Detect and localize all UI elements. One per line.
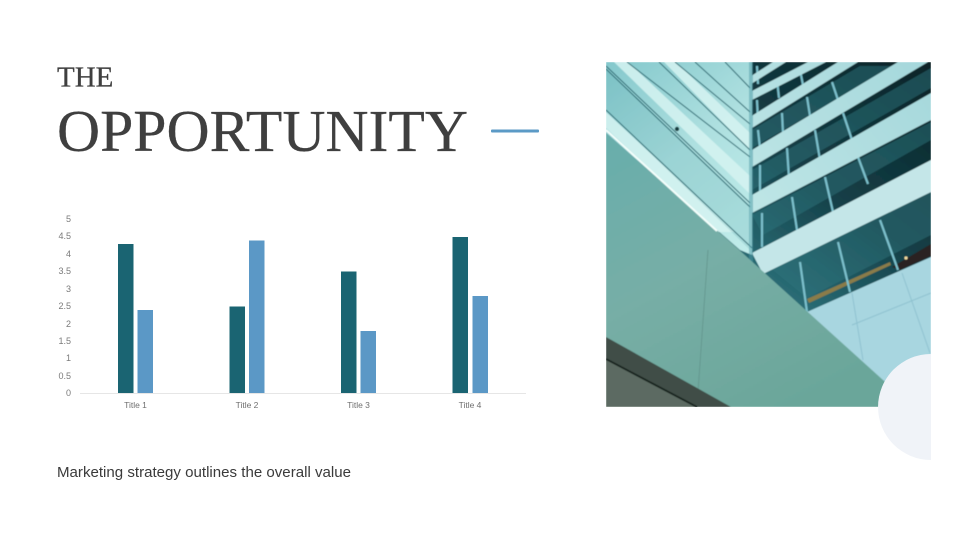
y axis labels: 2 (66, 319, 71, 329)
bars: Title 1 (118, 244, 153, 393)
category labels (124, 400, 482, 410)
bars: Title 4 (452, 237, 488, 393)
y axis labels: 3 (66, 284, 71, 294)
y axis labels: 1.5 (58, 336, 71, 346)
bars: Title 2 (230, 240, 264, 393)
photo: building atrium (606, 62, 931, 407)
y axis labels: 1 (66, 353, 71, 363)
teal wall (606, 133, 915, 407)
ceiling panels (808, 256, 931, 382)
y axis labels: 2.5 (58, 301, 71, 311)
category labels: Title 1 (124, 400, 147, 410)
bright glass bands (606, 62, 750, 232)
bars: Title 3 (341, 272, 376, 393)
amber rail (807, 262, 891, 303)
white floor beams (745, 62, 931, 213)
category labels: Title 2 (236, 400, 259, 410)
window mullions (757, 66, 898, 312)
accent dash (491, 130, 539, 132)
title line: OPPORTUNITY: OPPORTUNITY (57, 98, 468, 164)
y axis labels (58, 214, 71, 398)
y axis labels: 5 (66, 214, 71, 224)
lowest beam (752, 160, 931, 274)
title: THE OPPORTUNITY (57, 62, 468, 164)
category labels: Title 3 (347, 400, 370, 410)
y axis labels: 0 (66, 388, 71, 398)
dark lower band (606, 337, 731, 407)
y axis labels: 0.5 (58, 371, 71, 381)
title line: THE: THE (57, 62, 113, 94)
glass balustrades (606, 62, 752, 255)
caption text: Marketing strategy outlines the overall value (57, 464, 351, 481)
bar chart (58, 214, 526, 410)
decorative circle (878, 354, 931, 460)
category labels: Title 4 (459, 400, 482, 410)
y axis labels: 4.5 (58, 231, 71, 241)
darker top of glass (606, 68, 750, 250)
lighter lower strips inside the window rows (752, 66, 931, 298)
y axis labels: 3.5 (58, 266, 71, 276)
y axis labels: 4 (66, 249, 71, 259)
